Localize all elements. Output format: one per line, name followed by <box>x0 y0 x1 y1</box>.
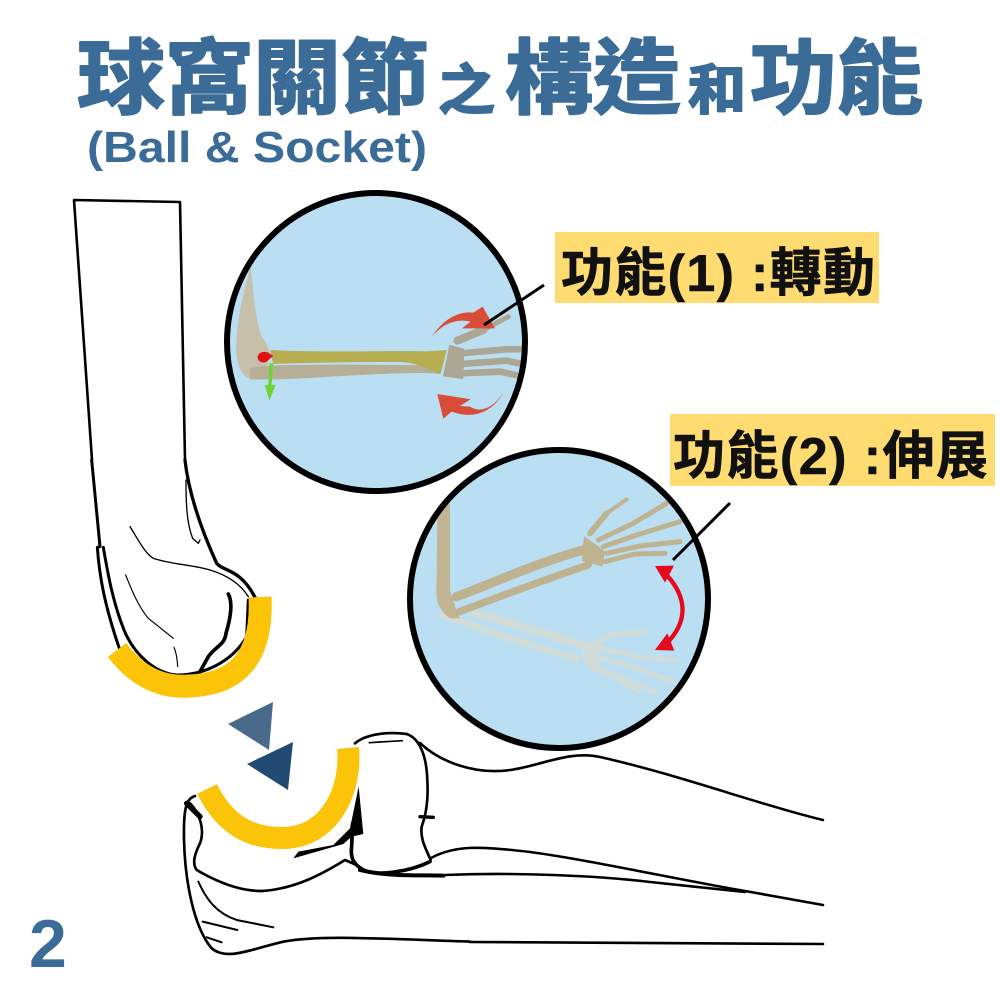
label: function 2 extension: 功能(2) :伸展 <box>673 428 988 486</box>
raised arm bones <box>436 503 460 618</box>
hand bones <box>445 317 527 377</box>
leader line: extension <box>673 503 730 560</box>
title <box>77 34 923 125</box>
subtitle: (Ball & Socket) <box>87 123 427 172</box>
green arrow <box>265 363 276 401</box>
illustration: upper arm bone with ball <box>74 200 255 675</box>
panel: extension circle <box>410 450 708 748</box>
humerus <box>236 267 269 379</box>
leader line: rotation <box>484 285 544 325</box>
lower yellow cartilage arc <box>207 748 348 838</box>
ghost lower arm <box>442 612 677 693</box>
title: 之 <box>438 61 495 121</box>
direction triangles <box>228 702 293 790</box>
title: 功能 <box>750 34 923 125</box>
red double arrow <box>667 575 682 642</box>
page number: 2 <box>29 906 67 982</box>
ulna <box>250 365 440 380</box>
title: 構造 <box>505 34 681 125</box>
label: function 1 rotation: 功能(1) :轉動 <box>561 245 875 303</box>
red pivot <box>258 352 273 362</box>
title: 和 <box>688 61 746 121</box>
panel: rotation circle <box>227 193 527 491</box>
upper yellow cartilage arc <box>117 597 260 686</box>
radius highlighted <box>270 350 447 374</box>
red curved arrows <box>432 307 495 337</box>
forearm bones illustration <box>184 733 823 954</box>
title: 球窩關節 <box>77 34 429 125</box>
